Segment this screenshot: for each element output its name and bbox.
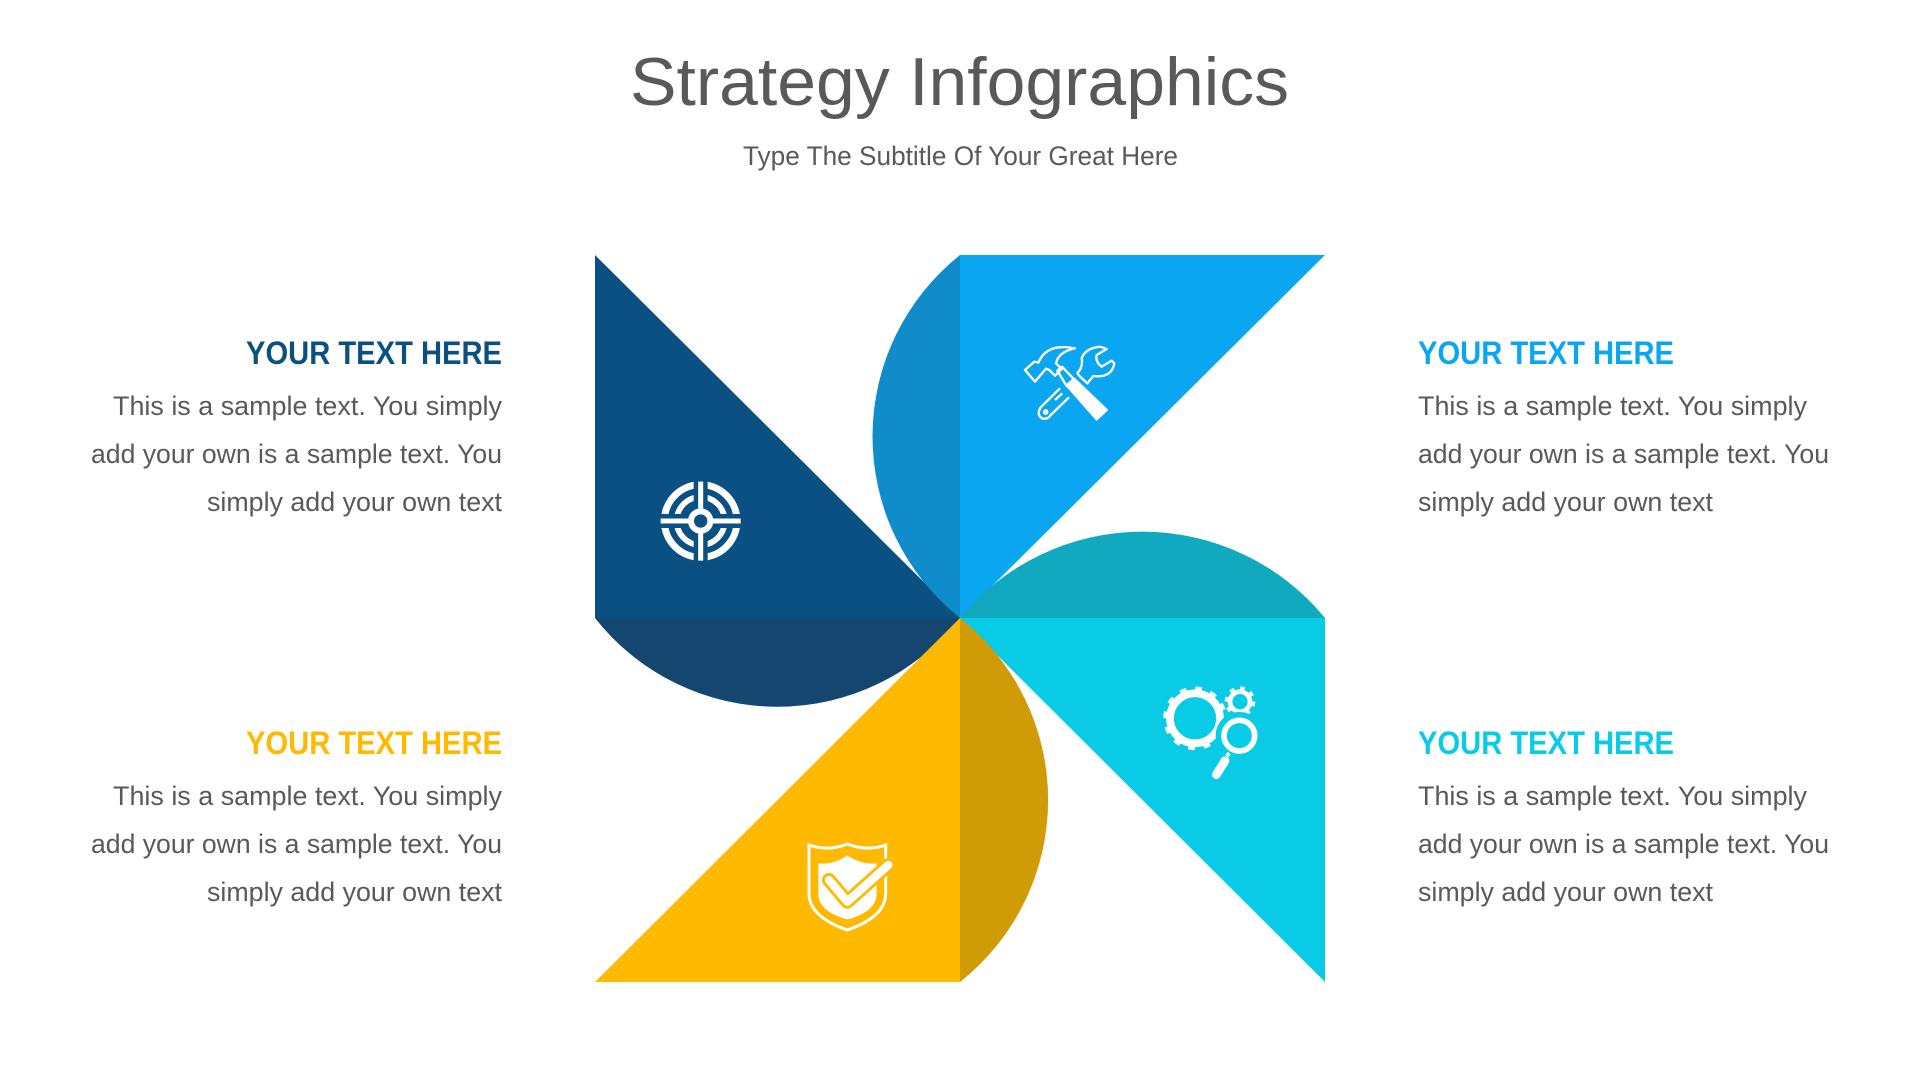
icon: hammer and wrench <box>1025 347 1114 419</box>
text block: bottom left <box>91 725 503 907</box>
text block: top left: add your own is a sample text. You <box>91 439 502 469</box>
text block: top left <box>91 335 503 517</box>
text block: bottom right: YOUR TEXT HERE <box>1418 725 1674 761</box>
text block: bottom right: This is a sample text. You simply <box>1418 781 1808 811</box>
icon: target <box>653 473 748 569</box>
text block: bottom left: YOUR TEXT HERE <box>246 725 502 761</box>
panel: pinwheel diagram <box>595 255 1325 982</box>
text block: bottom left: add your own is a sample text. You <box>91 829 502 859</box>
text block: top right: YOUR TEXT HERE <box>1418 335 1674 371</box>
text block: bottom left: This is a sample text. You simply <box>113 781 503 811</box>
subtitle: Type The Subtitle Of Your Great Here <box>743 141 1178 171</box>
text block: bottom right: add your own is a sample text. You <box>1418 829 1829 859</box>
title: Strategy Infographics <box>630 44 1289 120</box>
text block: bottom left: simply add your own text <box>207 877 503 907</box>
text block: top right: This is a sample text. You simply <box>1418 391 1808 421</box>
text block: top left: YOUR TEXT HERE <box>246 335 502 371</box>
text block: top right: add your own is a sample text. You <box>1418 439 1829 469</box>
text block: top left: simply add your own text <box>207 487 503 517</box>
text block: top right <box>1418 335 1829 517</box>
icon: gears and magnifier <box>1165 688 1259 775</box>
text block: bottom right <box>1418 725 1829 907</box>
petal: cyan <box>960 532 1325 982</box>
petal: navy <box>595 255 960 707</box>
text block: top right: simply add your own text <box>1418 487 1714 517</box>
text block: top left: This is a sample text. You simply <box>113 391 503 421</box>
text block: bottom right: simply add your own text <box>1418 877 1714 907</box>
petal: blue <box>873 255 1325 618</box>
icon: shield with check <box>809 844 888 930</box>
petal: gold <box>595 618 1048 982</box>
